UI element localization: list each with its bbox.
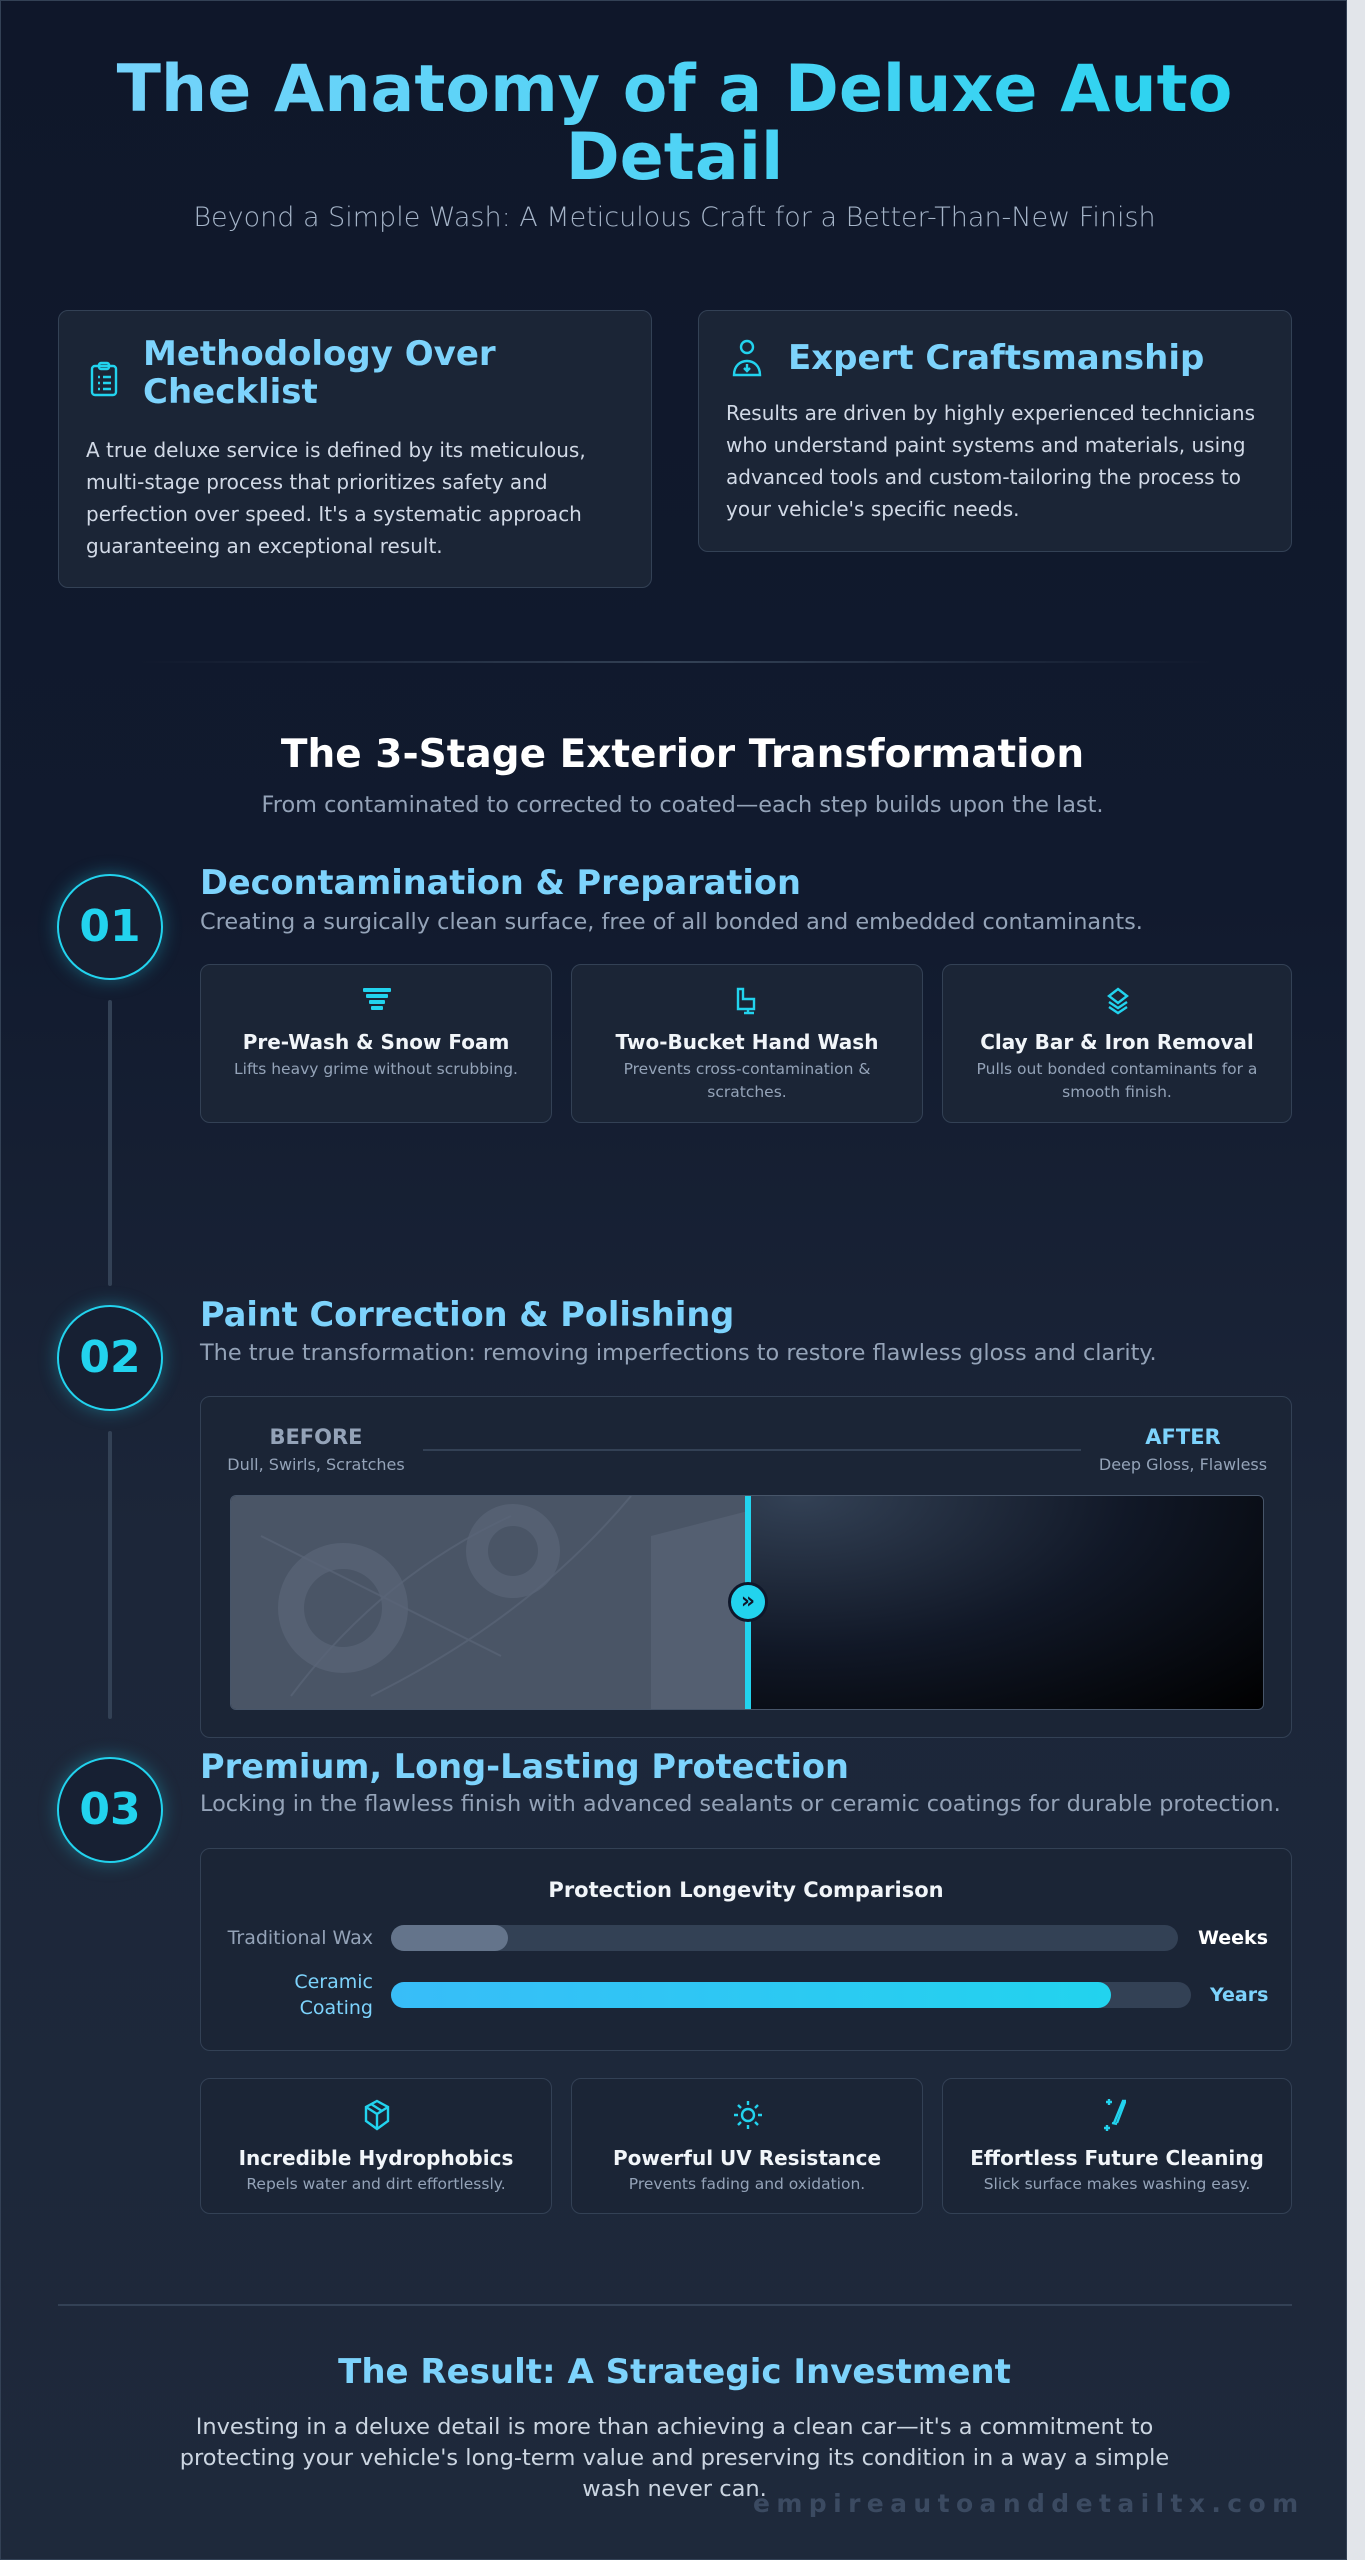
card: clay bar: Clay Bar & Iron Removal: [980, 1030, 1254, 1054]
card: uv: Powerful UV Resistance: [613, 2146, 881, 2170]
bar: ceramic: Ceramic: [294, 1971, 373, 1993]
circle: 01: 01: [79, 901, 141, 952]
section subheading: From contaminated to corrected to coated—each step builds upon the last.: [262, 792, 1104, 818]
card: pre-wash: [200, 964, 552, 1123]
panel: craftsmanship: [698, 310, 1292, 552]
text: A true deluxe service is defined by its meticulous, multi-stage process that prioritizes safety and perfection over speed. It's a systematic approach guaranteeing an exceptional result.: [86, 438, 586, 558]
circle: 02: 02: [79, 1332, 141, 1383]
title: Detail: [566, 120, 783, 195]
chart: protection longevity: Years: [1210, 1984, 1268, 2006]
heading: Decontamination & Preparation: [200, 863, 801, 902]
subtitle: Beyond a Simple Wash: A Meticulous Craft for a Better-Than-New Finish: [193, 202, 1156, 233]
card: two-bucket: Prevents cross-contamination & scratches.: [624, 1060, 870, 1101]
result text: Investing in a deluxe detail is more than achieving a clean car—it's a commitment to protecting your vehicle's long-term value and preserving its condition in a way a simple wash never can.: [180, 2414, 1169, 2502]
circle: 03: 03: [79, 1784, 141, 1835]
card: hydrophobics: [200, 2078, 552, 2214]
bar: ceramic: Coating: [300, 1997, 373, 2019]
result heading: The Result: A Strategic Investment: [338, 2352, 1011, 2392]
heading: Methodology Over: [143, 334, 496, 374]
card: pre-wash: Lifts heavy grime without scrubbing.: [234, 1060, 518, 1078]
panel: methodology: [58, 310, 652, 588]
heading: Checklist: [143, 372, 318, 412]
card: cleaning: Effortless Future Cleaning: [970, 2146, 1264, 2170]
title: [1, 56, 1348, 192]
sub: Creating a surgically clean surface, free of all bonded and embedded contaminants.: [200, 909, 1143, 935]
sub: Locking in the flawless finish with advanced sealants or ceramic coatings for durable protection.: [200, 1791, 1281, 1817]
heading: Paint Correction & Polishing: [200, 1295, 734, 1334]
icon: person: [732, 340, 762, 376]
card: two-bucket: [571, 964, 923, 1123]
section heading: The 3-Stage Exterior Transformation: [281, 732, 1084, 777]
card: pre-wash: Pre-Wash & Snow Foam: [243, 1030, 509, 1054]
step 02: [48, 1295, 1157, 1719]
card: hydrophobics: Incredible Hydrophobics: [239, 2146, 513, 2170]
bar: ceramic: [294, 1971, 373, 2019]
circle: 01: [57, 874, 163, 980]
card: clay bar: [942, 964, 1292, 1123]
card: uv: Prevents fading and oxidation.: [629, 2175, 865, 2193]
heading: [143, 334, 496, 412]
card: uv: [571, 2078, 923, 2214]
circle: 02: [57, 1305, 163, 1411]
sub: The true transformation: removing imperfections to restore flawless gloss and clarity.: [200, 1340, 1157, 1366]
title: The Anatomy of a Deluxe Auto: [117, 52, 1232, 127]
icon: slider handle: [728, 1582, 768, 1622]
panel: before/after: Dull, Swirls, Scratches: [227, 1455, 405, 1474]
circle: 03: [57, 1757, 163, 1863]
heading: Expert Craftsmanship: [788, 338, 1204, 378]
step 01: [48, 863, 1143, 1863]
step 03: [48, 1747, 1281, 1872]
watermark: empireautoanddetailtx.com: [753, 2489, 1305, 2518]
card: two-bucket: Two-Bucket Hand Wash: [616, 1030, 878, 1054]
icon: clipboard: [90, 362, 118, 396]
card: hydrophobics: Repels water and dirt effortlessly.: [246, 2175, 506, 2193]
label: after: AFTER: [1145, 1425, 1221, 1449]
panel: before/after: [200, 1396, 1292, 1738]
card: cleaning: Slick surface makes washing easy.: [984, 2175, 1250, 2193]
card: clay bar: Pulls out bonded contaminants for a smooth finish.: [977, 1060, 1257, 1101]
text: Results are driven by highly experienced technicians who understand paint systems and materials, using advanced tools and custom-tailoring the process to your vehicle's specific needs.: [726, 401, 1255, 521]
icon: slider handle: »: [741, 1589, 755, 1614]
bar: wax: Traditional Wax: [228, 1927, 373, 1949]
image: paint comparison: [230, 1495, 1264, 1710]
chart: protection longevity: Protection Longevity Comparison: [548, 1878, 944, 1902]
heading: Premium, Long-Lasting Protection: [200, 1747, 849, 1786]
panel: before/after: Deep Gloss, Flawless: [1099, 1455, 1267, 1474]
card: cleaning: [942, 2078, 1292, 2214]
chart: protection longevity: Weeks: [1198, 1927, 1268, 1949]
chart: protection longevity: [200, 1848, 1292, 2051]
label: before: BEFORE: [269, 1425, 363, 1449]
